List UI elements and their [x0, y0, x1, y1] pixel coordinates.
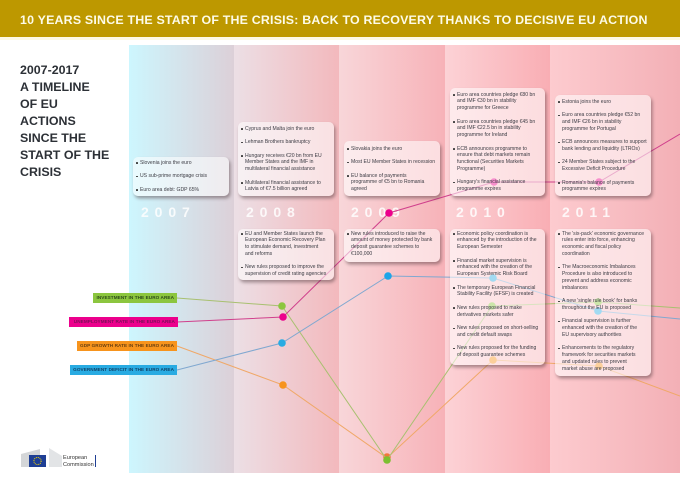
panel: 2009 events: Slovakia joins the euro — [351, 146, 402, 152]
panel: 2011 EU actions: framework for securities markets — [562, 352, 636, 358]
panel: 2010 events: ensure that debt markets remain — [457, 152, 530, 158]
panel: 2008 events: multilateral financial assistance — [245, 166, 315, 172]
panel: 2010 events: and IMF €30 bn in stability — [457, 98, 516, 104]
label: unemployment: UNEMPLOYMENT RATE IN THE EURO AREA — [74, 319, 175, 324]
label: investment — [93, 293, 177, 303]
panel: 2010 EU actions: New rules proposed on short-selling — [457, 325, 538, 331]
panel: 2010 events: Hungary's financial assistance — [457, 179, 525, 185]
panel: 2009 EU actions: deposit guarantee schemes to — [351, 244, 419, 250]
panel: 2008 EU actions: European Economic Recovery Plan — [245, 237, 325, 243]
title: 10 YEARS SINCE THE START OF THE CRISIS: BACK TO RECOVERY THANKS TO DECISIVE EU ACTION — [20, 12, 648, 26]
panel: 2011 events: Romania's balance of payments — [562, 180, 634, 186]
panel: 2011 events: bank lending and liquidity (LTROs) — [562, 146, 640, 152]
panel: 2007 events: US sub-prime mortgage crisis — [140, 173, 207, 179]
panel: 2007 events — [133, 157, 229, 196]
panel: 2008 EU actions: to stimulate demand, investment — [245, 244, 318, 250]
line: GDP growth — [177, 346, 680, 461]
panel: 2011 events: Euro area countries pledge €52 bn — [562, 112, 640, 118]
panel: 2010 EU actions: Financial market supervision is — [457, 258, 527, 264]
heading: timeline: ACTIONS — [20, 114, 76, 128]
panel: 2008 EU actions: EU and Member States launch the — [245, 231, 323, 237]
panel: 2011 EU actions: Enhancements to the regulatory — [562, 345, 634, 351]
panel: 2010 events — [450, 88, 545, 196]
panel: 2008 events: Multilateral financial assistance to — [245, 180, 321, 186]
panel: 2009 EU actions: New rules introduced to raise the — [351, 231, 425, 237]
panel: 2009 events: Most EU Member States in recession — [351, 159, 435, 165]
label: unemployment — [69, 317, 178, 327]
panel: 2011 EU actions: imbalances — [562, 285, 588, 291]
panel: 2008 events: Member States and the IMF in — [245, 159, 314, 165]
column: 2008 background — [234, 45, 339, 473]
panel: 2011 events: ECB announces measures to support — [562, 139, 647, 145]
panel: 2011 EU actions: enhanced with the creation of the — [562, 325, 637, 331]
panel: 2008 events: Latvia of €7.5 billion agreed — [245, 186, 307, 192]
heading: timeline: 2007-2017 — [20, 62, 79, 76]
panel: 2010 events: Euro area countries pledge €80 bn — [457, 92, 535, 98]
logo text — [63, 455, 94, 468]
panel: 2011 events: Excessive Deficit Procedure — [562, 166, 625, 172]
panel: 2010 EU actions: Economic policy coordination is — [457, 231, 528, 237]
panel: 2010 events: programme for Greece — [457, 105, 509, 111]
panel: 2011 events: and IMF €26 bn in stability — [562, 119, 621, 125]
column: 2010 background — [445, 45, 550, 473]
logo: European Commission — [21, 448, 96, 468]
panel: 2010 EU actions: derivatives markets safer — [457, 312, 514, 318]
panel: 2011 EU actions: and updated rules to prevent — [562, 359, 627, 365]
panel: 2010 events: and IMF €22.5 bn in stability — [457, 125, 521, 131]
panel: 2011 EU actions: A new 'single rule book' for banks — [562, 298, 637, 304]
logo text: European — [63, 455, 87, 461]
panel: 2008 EU actions: and reforms — [245, 251, 272, 257]
label: GDP growth — [77, 341, 177, 351]
panel: 2009 EU actions: amount of money protected by bank — [351, 237, 432, 243]
panel: 2011 events: 24 Member States subject to the — [562, 159, 635, 165]
panel: 2009 EU actions — [344, 229, 440, 262]
panel: 2010 EU actions: enhanced with the creation of the — [457, 264, 532, 270]
icon: EU flag — [29, 455, 46, 467]
line: investment — [177, 298, 680, 464]
column: 2011 background — [550, 45, 680, 473]
panel: 2011 EU actions: Procedure is also introduced to — [562, 271, 632, 277]
panel: 2011 EU actions: Financial supervision is further — [562, 318, 631, 324]
panel: 2011 events: Estonia joins the euro — [562, 99, 611, 105]
icon: building — [21, 448, 62, 467]
panel: 2008 EU actions — [238, 229, 334, 280]
heading: timeline — [20, 62, 109, 178]
label: government deficit — [70, 365, 177, 375]
panel: 2008 events: Cyprus and Malta join the euro — [245, 126, 314, 132]
panel: 2007 events: Slovenia joins the euro — [140, 160, 192, 166]
panel: 2010 events: programme expires — [457, 186, 501, 192]
panel: 2011 EU actions: economic and fiscal policy — [562, 244, 621, 250]
panel: 2010 EU actions: European Systemic Risk Board — [457, 271, 528, 277]
panel: 2008 events: Hungary receives €20 bn from EU — [245, 153, 322, 159]
logo text: Commission — [63, 462, 94, 468]
heading: timeline: SINCE THE — [20, 130, 86, 144]
panel: 2011 events: programme for Portugal — [562, 126, 616, 132]
panel: 2008 events: Lehman Brothers bankruptcy — [245, 139, 310, 145]
panel: 2011 EU actions: throughout the EU is proposed — [562, 305, 631, 311]
column: 2009 background — [339, 45, 445, 473]
line: government deficit — [177, 272, 680, 370]
panel: 2010 EU actions: New rules proposed to make — [457, 305, 522, 311]
panel: 2009 events: agreed — [351, 186, 367, 192]
panel: 2009 events: programme of €5 bn to Romania — [351, 179, 424, 185]
panel: 2011 EU actions: The Macroeconomic Imbalances — [562, 264, 636, 270]
panel: 2011 EU actions: coordination — [562, 251, 590, 257]
panel: 2009 EU actions: €100,000 — [351, 251, 372, 257]
panel: 2010 events: ECB announces programme to — [457, 146, 527, 152]
panel: 2007 events: Euro area debt: GDP 65% — [140, 187, 199, 193]
panel: 2009 events — [344, 141, 440, 196]
panel: 2010 EU actions: enhanced by the introduction of the — [457, 237, 537, 243]
heading: timeline: CRISIS — [20, 164, 61, 178]
panel: 2009 events: EU balance of payments — [351, 173, 406, 179]
panel: 2010 EU actions: The temporary European Financial — [457, 285, 535, 291]
panel: 2011 EU actions: EU supervisory authorities — [562, 332, 621, 338]
panel: 2011 EU actions — [555, 229, 651, 376]
heading: timeline: A TIMELINE — [20, 80, 90, 94]
panel: 2011 EU actions: The 'six-pack' economic governance — [562, 231, 644, 237]
header banner — [0, 0, 680, 37]
year 2009: 2009 — [351, 204, 406, 220]
panel: 2010 EU actions: and credit default swaps — [457, 332, 512, 338]
label: investment: INVESTMENT IN THE EURO AREA — [96, 295, 174, 300]
panel: 2010 EU actions: European Semester — [457, 244, 502, 250]
year 2011: 2011 — [562, 204, 616, 220]
panel: 2011 EU actions: rules enter into force, enhancing — [562, 237, 635, 243]
year 2007: 2007 — [141, 204, 196, 220]
panel: 2008 events — [238, 122, 334, 196]
panel: 2008 EU actions: supervision of credit rating agencies — [245, 271, 326, 277]
panel: 2010 EU actions: Stability Facility (EFSF) is created — [457, 291, 533, 297]
panel: 2011 events: programme expires — [562, 186, 606, 192]
panel: 2011 EU actions: prevent and address economic — [562, 278, 632, 284]
panel: 2011 EU actions: market abuse are proposed — [562, 366, 624, 372]
label: GDP growth: GDP GROWTH RATE IN THE EURO AREA — [80, 343, 174, 348]
logo bar — [95, 455, 96, 467]
label: government deficit: GOVERNMENT DEFICIT IN THE EURO AREA — [73, 367, 174, 372]
panel: 2010 EU actions: of deposit guarantee schemes — [457, 352, 525, 358]
panel: 2010 events: functional (Securities Markets — [457, 159, 524, 165]
heading: timeline: OF EU — [20, 96, 58, 110]
panel: 2010 events: Programme) — [457, 166, 485, 172]
year 2008: 2008 — [246, 204, 301, 220]
panel: 2010 events: programme for Ireland — [457, 132, 507, 138]
year 2010: 2010 — [456, 204, 511, 220]
heading: timeline: START OF THE — [20, 148, 109, 162]
column: 2007 background — [129, 45, 234, 473]
line: unemployment — [177, 134, 680, 322]
panel: 2010 events: Euro area countries pledge €45 bn — [457, 119, 535, 125]
panel: 2010 EU actions: New rules proposed for the funding — [457, 345, 536, 351]
panel: 2008 EU actions: New rules proposed to improve the — [245, 264, 324, 270]
panel: 2011 events — [555, 95, 651, 196]
panel: 2010 EU actions — [450, 229, 545, 365]
